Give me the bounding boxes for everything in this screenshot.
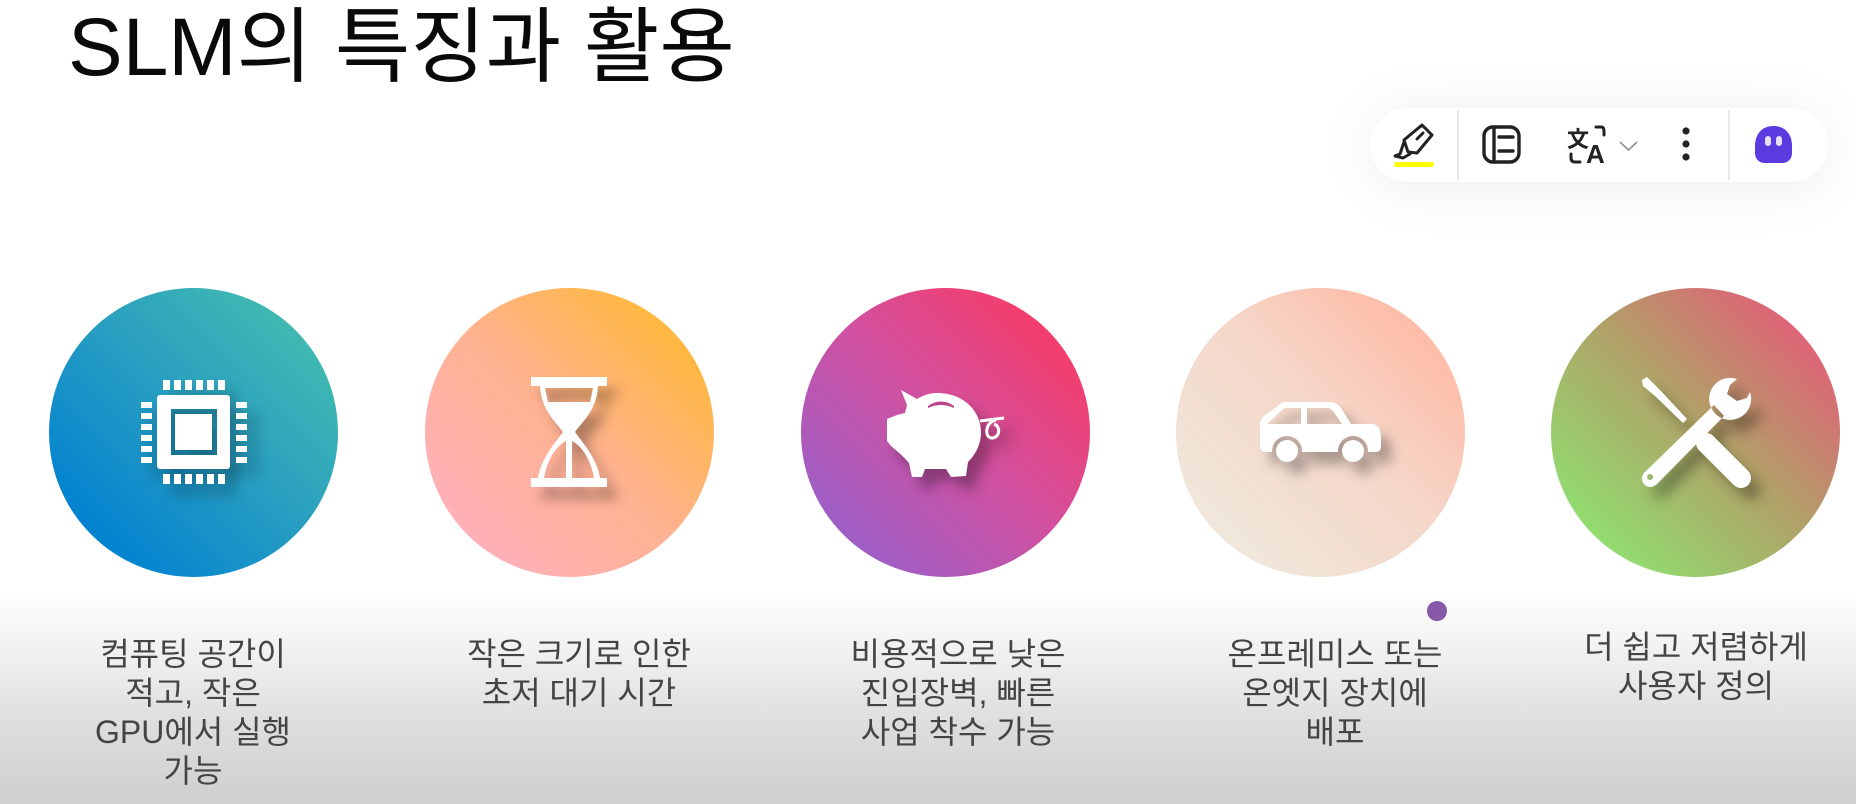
icon: notes panel (1484, 127, 1519, 162)
panel: cost circle (800, 288, 1090, 577)
caption: compute: 가능 (164, 753, 222, 789)
icon: chevron (1620, 142, 1637, 150)
caption: customization: 더 쉽고 저렴하게 (1584, 629, 1808, 665)
panel: compute circle (48, 288, 338, 577)
icon: hourglass (531, 377, 607, 487)
icon: piggy bank (887, 390, 1004, 477)
title: SLM의 특징과 활용 (68, 2, 735, 93)
caption: latency (467, 636, 691, 711)
caption: compute: 컴퓨팅 공간이 (100, 636, 286, 672)
caption: cost: 진입장벽, 빠른 (861, 675, 1055, 711)
caption: compute: GPU에서 실행 (95, 714, 291, 750)
icon: car (1260, 402, 1381, 462)
caption: compute: 적고, 작은 (125, 675, 261, 711)
icon: purple assistant (1755, 126, 1792, 163)
caption: deployment: 배포 (1306, 714, 1364, 750)
caption: deployment: 온프레미스 또는 (1228, 636, 1442, 672)
panel: customization circle (1550, 288, 1840, 577)
icon: wrench and screwdriver (1642, 377, 1751, 487)
caption: cost: 사업 착수 가능 (861, 714, 1055, 750)
divider (1457, 110, 1459, 180)
purple dot (1427, 601, 1447, 621)
caption: latency: 작은 크기로 인한 (467, 636, 691, 672)
panel: latency circle (424, 288, 714, 577)
caption: cost: 비용적으로 낮은 (850, 636, 1065, 672)
panel: deployment circle (1176, 288, 1464, 577)
caption: deployment (1228, 636, 1442, 750)
caption: customization: 사용자 정의 (1618, 668, 1774, 704)
icon: processor chip (141, 380, 247, 484)
icon: translate (1567, 122, 1605, 169)
caption: cost (850, 636, 1065, 750)
toolbar (1394, 110, 1792, 190)
caption: customization (1584, 629, 1808, 704)
divider (1728, 110, 1730, 180)
caption: deployment: 온엣지 장치에 (1242, 675, 1428, 711)
caption: latency: 초저 대기 시간 (482, 675, 676, 711)
icon: highlighter (1394, 125, 1434, 167)
caption: compute (95, 636, 291, 789)
icon: translate: 文 (1567, 122, 1589, 154)
icon: more menu (1682, 127, 1690, 161)
icon: translate: A (1586, 139, 1605, 169)
